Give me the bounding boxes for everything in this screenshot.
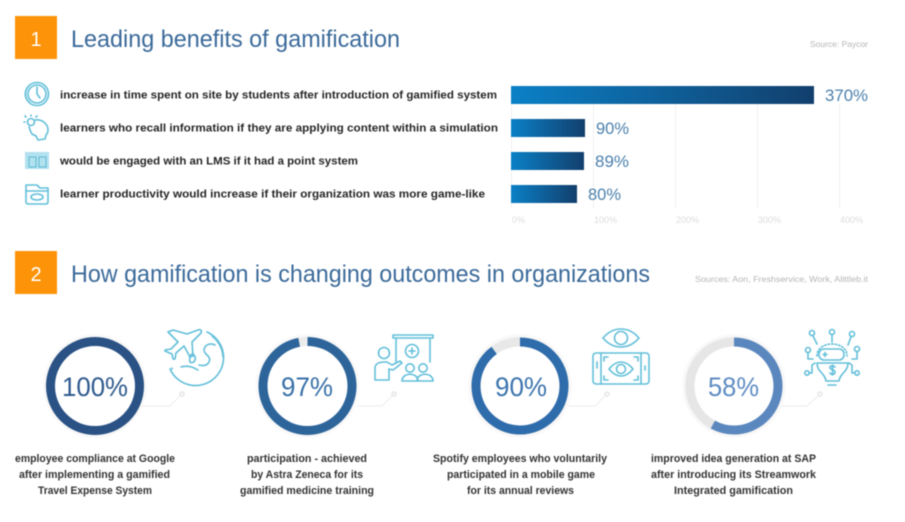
icon: clock: [25, 82, 48, 106]
section 2 number badge: [15, 251, 57, 294]
caption: after implementing a gamified: [19, 469, 170, 481]
section 2 number badge: 2: [30, 264, 42, 286]
value: 89%: 89%: [595, 152, 629, 171]
caption: [15, 453, 175, 497]
caption: for its annual reviews: [467, 485, 574, 497]
panel: Spotify 90%: [433, 329, 649, 497]
icon: scoreboard: [25, 152, 49, 169]
caption: Spotify employees who voluntarily: [433, 453, 608, 465]
connector: [782, 392, 822, 406]
icon: presenter with audience: [375, 335, 433, 381]
row label: productivity: learner productivity would increase if their organization was more game-like: [60, 188, 485, 200]
bar chart: [511, 86, 868, 225]
caption: employee compliance at Google: [15, 453, 175, 465]
row label: LMS: would be engaged with an LMS if it had a point system: [59, 156, 358, 168]
donut: 100%: [42, 333, 148, 439]
caption: gamified medicine training: [240, 485, 374, 497]
caption: participation - achieved: [247, 453, 367, 465]
axis labels: 400%: [840, 215, 863, 225]
caption: [433, 453, 608, 497]
donut: 58%: 58%: [708, 372, 759, 402]
icon: folder with game: [26, 185, 48, 204]
caption: participated in a mobile game: [447, 469, 595, 481]
caption: after introducing its Streamwork: [651, 469, 817, 481]
section 1 heading: Leading benefits of gamification: [71, 26, 400, 53]
panel: Google 100%: [15, 330, 224, 497]
caption: [240, 453, 374, 497]
section 2 heading: How gamification is changing outcomes in organizations: [71, 261, 650, 288]
caption: improved idea generation at SAP: [651, 453, 816, 465]
connector: [357, 392, 396, 406]
row label: time on site: increase in time spent on site by students after introduction of gamified system: [60, 90, 497, 102]
icon: eye and phone: [593, 329, 649, 384]
donut: 58%: [681, 333, 787, 439]
axis labels: 0%: [512, 215, 525, 225]
value: 90%: 90%: [596, 119, 629, 138]
icon: head with light bulb: [24, 115, 48, 140]
panel: SAP 58%: [651, 330, 860, 497]
bar: 80%: [511, 185, 577, 203]
donut: 90%: [467, 333, 573, 439]
caption: [651, 453, 817, 497]
donut: 97%: [254, 333, 360, 439]
bar: 90%: [511, 119, 585, 137]
donut: 97%: 97%: [281, 372, 333, 402]
panel: Astra Zeneca 97%: [240, 333, 433, 497]
axis labels: 100%: [594, 215, 617, 225]
icon: plane and globe: [165, 330, 224, 386]
caption: Integrated gamification: [674, 485, 793, 497]
icon: game controller light bulb: [805, 330, 860, 385]
axis labels: 200%: [676, 215, 699, 225]
sources: Sources: Aon, Freshservice, Work, Alittleb.it: [695, 274, 869, 284]
bar: 89%: [511, 152, 584, 170]
connector: [141, 392, 184, 406]
caption: by Astra Zeneca for its: [251, 469, 363, 481]
caption: Travel Expense System: [38, 485, 152, 497]
section 1 number badge: 1: [30, 29, 42, 51]
bar: 370%: [511, 86, 814, 104]
value: 80%: 80%: [588, 185, 621, 204]
donut: 90%: 90%: [495, 372, 547, 402]
section 1 number badge: [15, 16, 57, 59]
axis labels: 300%: [758, 215, 781, 225]
source: Paycor: Source: Paycor: [810, 39, 868, 49]
connector: [568, 392, 609, 406]
value: 370%: 370%: [825, 86, 868, 105]
axis labels: [512, 215, 863, 225]
donut: 100%: 100%: [62, 372, 128, 402]
row label: recall: learners who recall information if they are applying content within a simulation: [60, 122, 498, 134]
